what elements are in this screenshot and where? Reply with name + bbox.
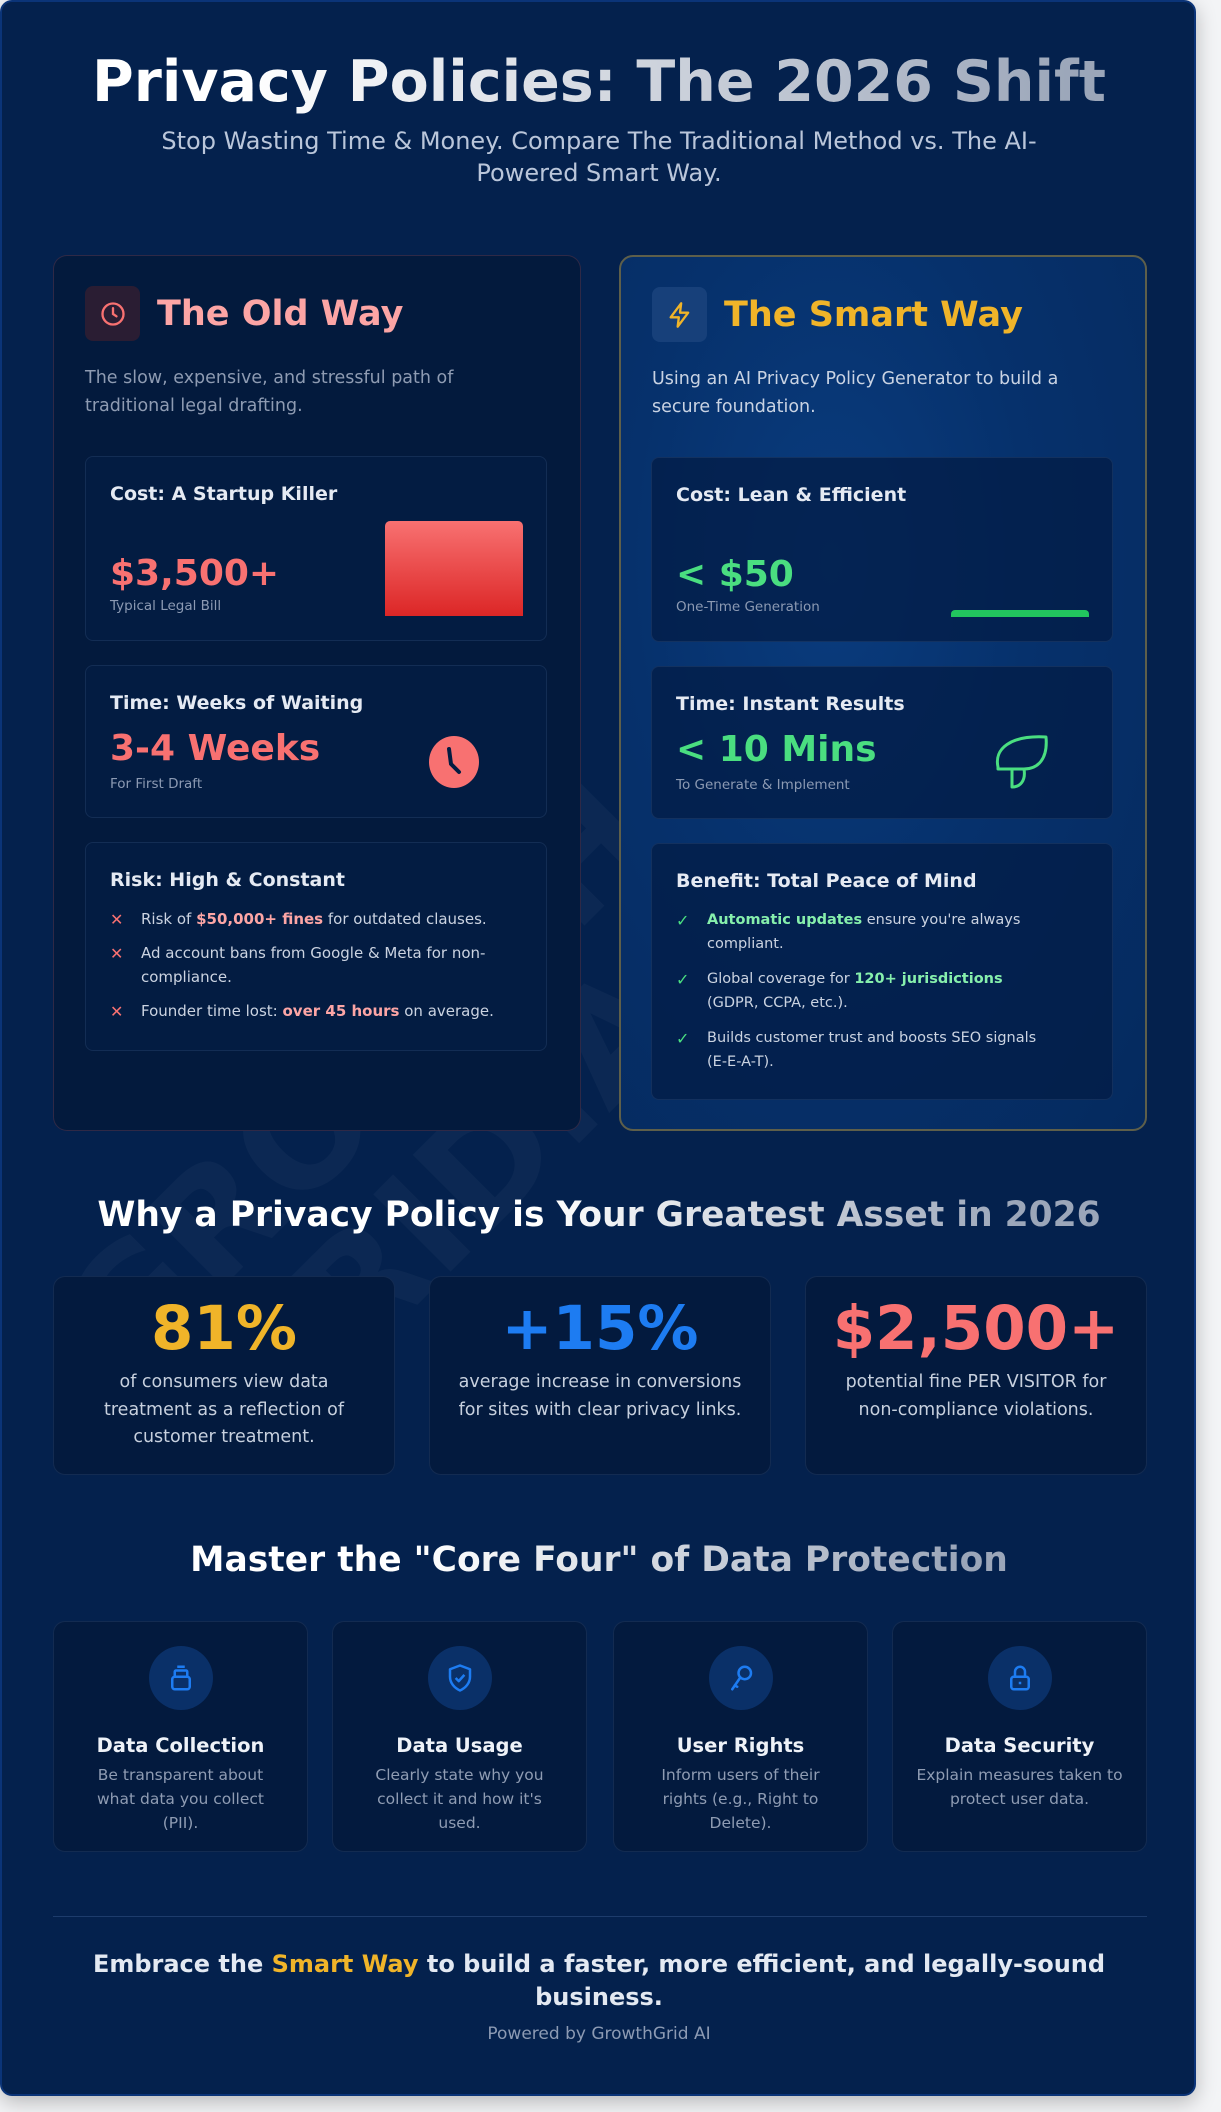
heading: smart way: [652, 287, 1023, 342]
card: cost smart: [651, 457, 1113, 642]
stat: +15%: average increase in conversions for sites with clear privacy links.: [459, 1372, 741, 1420]
card: data security: Data Security: [945, 1734, 1094, 1757]
watermark: [0, 708, 836, 1556]
stat: +15%: +15%: [501, 1293, 699, 1364]
heading: old way: [85, 286, 403, 341]
card: cost: Typical Legal Bill: [110, 598, 221, 614]
watermark: GRID.AI: [174, 894, 756, 1476]
list: benefits: ✓: [676, 911, 689, 930]
icon: bolt: [652, 287, 707, 342]
card: risk: [85, 842, 547, 1051]
card: benefit: [651, 843, 1113, 1100]
stat: $2,500+: [805, 1276, 1147, 1475]
list: risks: ✕: [110, 910, 123, 929]
card: risk: ✕: [110, 944, 123, 963]
watermark: GROWTH: [29, 749, 689, 1409]
list: risks: Risk of $50,000+ fines for outdated clauses.: [141, 910, 487, 928]
card: cost: $3,500+: [110, 553, 279, 594]
text: old desc: The slow, expensive, and stressful path of traditional legal drafting.: [85, 368, 453, 416]
icon: leaf: [996, 735, 1048, 788]
stat: +15%: [429, 1276, 771, 1475]
card: cost: Cost: A Startup Killer: [110, 483, 337, 505]
card: benefit: ✓: [676, 970, 689, 989]
card: user rights: Inform users of their rights (e.g., Right to Delete).: [661, 1766, 820, 1832]
footer: powered by: Powered by GrowthGrid AI: [487, 2024, 711, 2044]
heading: old way: The Old Way: [157, 294, 403, 334]
card: time: 3-4 Weeks: [110, 728, 320, 769]
footer: cta: Embrace the Smart Way to build a faster, more efficient, and legally-sound business.: [93, 1950, 1105, 2011]
card: user rights: [613, 1621, 868, 1852]
card: risk: Ad account bans from Google & Meta for non-compliance.: [141, 944, 485, 986]
card: time smart: < 10 Mins: [676, 729, 877, 770]
card: cost smart: Cost: Lean & Efficient: [676, 484, 906, 506]
card: risk: Risk: High & Constant: [110, 869, 345, 891]
icon: clock: [85, 286, 140, 341]
heading: why: Why a Privacy Policy is Your Greatest Asset in 2026: [97, 1195, 1101, 1235]
card: time: Time: Weeks of Waiting: [110, 692, 363, 714]
subtitle: Stop Wasting Time & Money. Compare The Traditional Method vs. The AI-Powered Smart Way.: [161, 127, 1037, 187]
list: benefits: Automatic updates ensure you're always compliant.: [707, 912, 1020, 952]
card: data security: Explain measures taken to protect user data.: [916, 1766, 1123, 1808]
stat: 81%: [53, 1276, 395, 1475]
stat: $2,500+: potential fine PER VISITOR for non-compliance violations.: [846, 1372, 1106, 1420]
card: time smart: To Generate & Implement: [676, 777, 850, 793]
bar: cost: [385, 521, 523, 616]
bar: cost smart: [951, 610, 1089, 617]
card: time smart: Time: Instant Results: [676, 693, 905, 715]
title: Privacy Policies: The 2026 Shift: [92, 49, 1106, 115]
card: benefit: Builds customer trust and boosts SEO signals: [707, 1030, 1036, 1046]
panel: old way: [53, 255, 581, 1131]
card: time: For First Draft: [110, 776, 202, 792]
card: time: [85, 665, 547, 818]
card: data security: [892, 1621, 1147, 1852]
card: risk: Founder time lost: over 45 hours on average.: [141, 1002, 494, 1020]
card: time smart: [651, 666, 1113, 819]
stat: $2,500+: $2,500+: [833, 1293, 1119, 1364]
card: benefit: Global coverage for 120+ jurisdictions: [707, 971, 1003, 987]
panel: smart way: [619, 255, 1147, 1131]
card: cost: [85, 456, 547, 641]
text: smart desc: Using an AI Privacy Policy Generator to build a secure foundation.: [652, 369, 1058, 417]
card: data usage: Clearly state why you collect it and how it's used.: [375, 1766, 544, 1832]
card: data collection: Data Collection: [97, 1734, 264, 1757]
card: data usage: [332, 1621, 587, 1852]
heading: smart way: The Smart Way: [724, 294, 1023, 334]
card: risk: ✕: [110, 1002, 123, 1021]
heading: core four: [2, 1539, 1196, 1581]
card: benefit: Benefit: Total Peace of Mind: [676, 870, 977, 892]
card: data collection: Be transparent about what data you collect (PII).: [97, 1766, 264, 1832]
card: data usage: Data Usage: [396, 1734, 523, 1757]
icon: clock solid: [429, 736, 479, 788]
card: cost smart: One-Time Generation: [676, 599, 820, 615]
stat: 81%: of consumers view data treatment as a reflection of customer treatment.: [104, 1372, 344, 1447]
card: benefit: (E-E-A-T).: [707, 1054, 774, 1070]
card: benefit: ✓: [676, 1029, 689, 1048]
card: data collection: [53, 1621, 308, 1852]
card: cost smart: < $50: [676, 554, 794, 595]
card: benefit: (GDPR, CCPA, etc.).: [707, 995, 848, 1011]
heading: core four: Master the "Core Four" of Data Protection: [190, 1540, 1008, 1580]
stat: 81%: 81%: [151, 1293, 297, 1364]
card: user rights: User Rights: [677, 1734, 804, 1757]
